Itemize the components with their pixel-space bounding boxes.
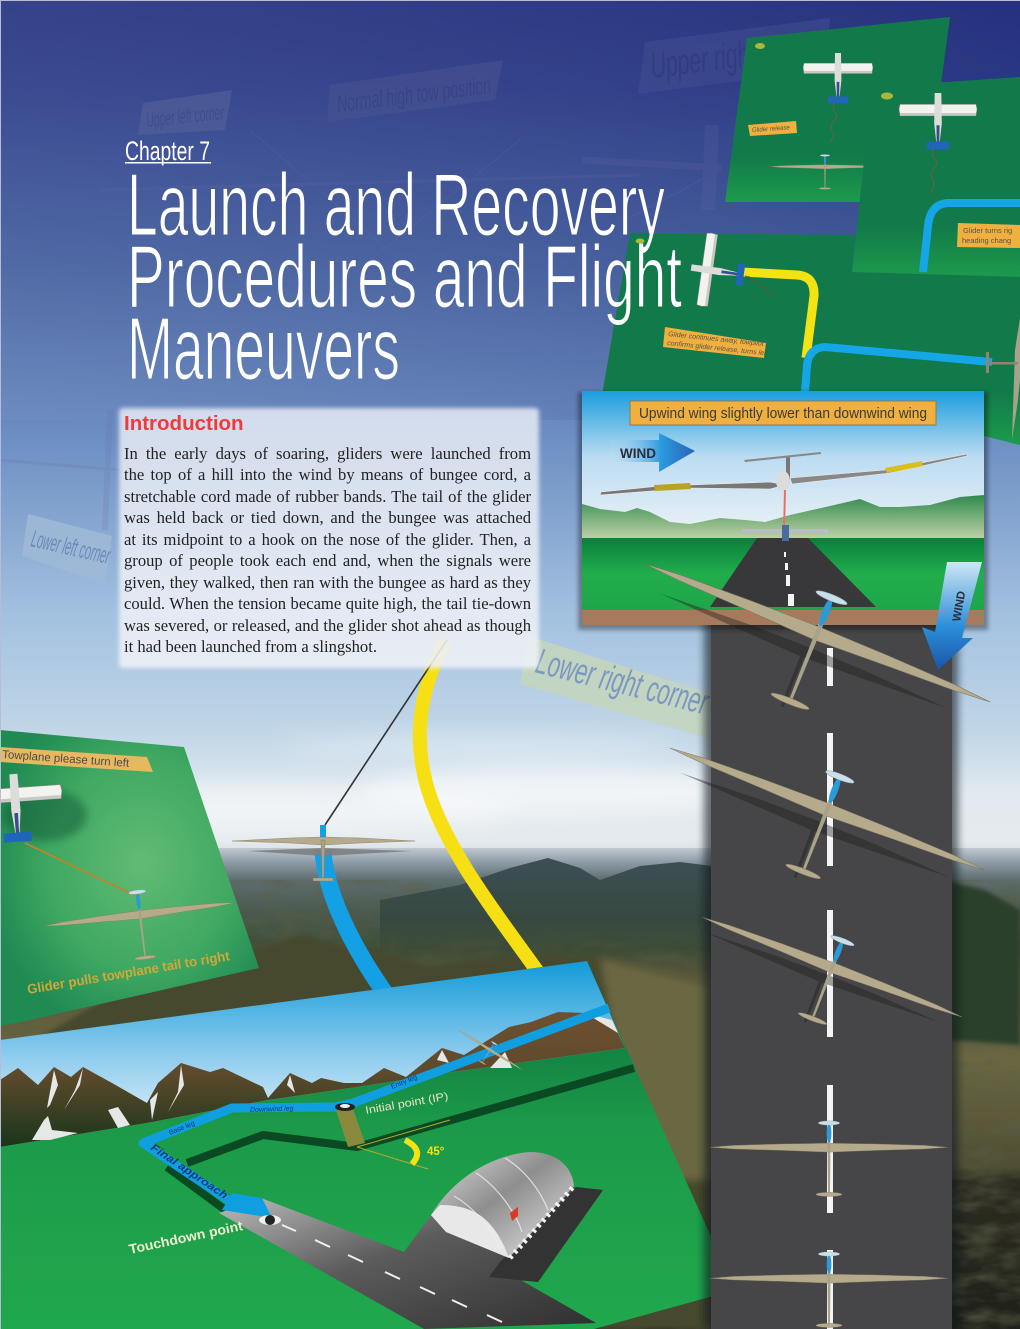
title: Launch and Recovery	[127, 155, 665, 254]
body text: could. When the tension became quite high, the tail tie-down	[124, 594, 531, 613]
label: 45 degrees: 45°	[427, 1146, 445, 1158]
glider wings level 4	[710, 1121, 948, 1196]
towplane turned left	[686, 231, 749, 311]
glider crabbing 2	[645, 713, 998, 935]
ghost label: upper right corner: Upper right	[648, 32, 758, 86]
tag: glider turns right: Glider turns rig	[963, 226, 1012, 235]
landscape	[0, 848, 1020, 1329]
towplane	[0, 771, 65, 845]
yellow flight path	[742, 272, 814, 358]
label: downwind leg: Downwind leg	[250, 1105, 294, 1114]
angle arrow	[405, 1140, 417, 1164]
ghost label: lower right corner	[520, 636, 714, 738]
title	[127, 155, 682, 398]
forested ridge right	[950, 882, 1020, 1045]
blue flight path	[805, 347, 992, 392]
tow rope	[325, 640, 447, 825]
runway dashes	[282, 1225, 502, 1322]
mountains	[0, 1012, 625, 1147]
pylon	[335, 1103, 365, 1147]
tag: towplane please turn left	[0, 747, 153, 772]
body text: at its midpoint to a hook on the nose of the glider. Then, a	[124, 530, 531, 549]
sky background	[0, 0, 1020, 880]
distant hill	[380, 858, 712, 965]
ghost labels and airplanes in the sky: Lower left corner	[29, 526, 113, 570]
towplane ahead	[742, 525, 828, 541]
tag: glider continues: confirms glider release, turns left	[667, 340, 769, 358]
ghost label: normal high tow position	[327, 60, 503, 122]
ground shadow of flight path	[167, 1068, 634, 1212]
body text: stretchable cord made of rubber bands. The tail of the glider	[124, 487, 531, 506]
towplane shadow	[3, 789, 87, 841]
towplane	[899, 93, 977, 149]
tag: panel number	[636, 238, 644, 244]
foreground slope	[0, 935, 712, 1329]
title: Maneuvers	[127, 299, 400, 398]
runway	[710, 538, 876, 607]
brown strip	[582, 610, 984, 625]
tag: glider release	[748, 121, 797, 136]
tow sequence: blue flight path	[323, 850, 390, 1000]
tow rope	[829, 102, 837, 143]
wind arrow down: WIND	[951, 590, 968, 623]
ghost label: lower left corner	[22, 514, 113, 584]
dark runway strip	[704, 620, 958, 1329]
tag: glider continues	[663, 327, 770, 358]
tow rope	[930, 148, 937, 193]
ghost label: upper left corner: Upper left corner	[145, 102, 226, 132]
glider crabbing 1	[616, 526, 1005, 773]
towplane	[803, 53, 873, 103]
glider	[770, 154, 880, 189]
panel: lockout, towplane please turn left	[0, 730, 259, 1026]
ghost label: normal high tow position: Normal high tow position	[335, 72, 493, 118]
body text	[124, 444, 531, 656]
tag: glider release: Glider release	[752, 124, 790, 134]
tag: panel number	[881, 92, 893, 100]
tag: glider turns right	[957, 223, 1020, 248]
touchdown target	[259, 1215, 281, 1225]
chapter label: Chapter 7	[125, 136, 210, 166]
body text: was held back or tied down, and the bungee was attached	[124, 508, 531, 527]
body text: given, they walked, then ran with the bungee as hard as they	[124, 573, 531, 592]
tag: panel number	[755, 43, 765, 49]
body text: it had been launched from a slingshot.	[124, 637, 377, 656]
tow rope	[745, 276, 772, 297]
tow rope	[25, 843, 138, 897]
wind arrow	[610, 433, 695, 472]
wind arrow down	[922, 562, 982, 670]
green field	[582, 538, 984, 610]
tag: glider continues: Glider continues away, towpilot	[668, 331, 765, 348]
body text: was severed, or released, and the glider shot ahead as though	[124, 616, 531, 634]
tow sequence: yellow flight path	[420, 640, 540, 975]
panel: glider continues away	[602, 231, 1020, 445]
centre line dashes	[827, 648, 833, 1329]
label: initial point: Initial point (IP)	[364, 1091, 449, 1117]
heading: introduction: Introduction	[124, 412, 244, 435]
glider front view	[600, 452, 967, 532]
glider wings level 5	[710, 1252, 948, 1327]
title: Procedures and Flight	[127, 227, 682, 326]
tag: glider turns right: heading chang	[962, 236, 1011, 245]
hangar	[431, 1152, 574, 1258]
wing shadow	[248, 848, 412, 856]
glider crabbing 3	[682, 889, 973, 1071]
blue flight path	[143, 1008, 609, 1208]
label: entry leg: Entry leg	[390, 1074, 418, 1091]
intro panel background	[119, 408, 539, 668]
tag: towplane please turn left: Towplane please turn left	[2, 749, 130, 770]
sky	[0, 961, 625, 1147]
panel: glider turns right	[852, 77, 1020, 277]
label: touchdown point: Touchdown point	[128, 1218, 245, 1257]
panel: traffic pattern landing scene	[0, 961, 735, 1329]
label: final approach: Final approach	[148, 1142, 230, 1202]
fuselage nose	[320, 825, 326, 845]
label: Upwind wing slightly lower than downwind wing	[639, 405, 927, 422]
clouds	[0, 735, 760, 832]
glider on tow	[232, 825, 415, 881]
ground angle marker	[357, 1120, 450, 1169]
glider at right edge	[986, 318, 1020, 440]
panel: glider release	[725, 17, 950, 202]
ghost labels and airplanes in the sky	[0, 18, 830, 738]
distant hills	[582, 495, 984, 538]
label: base leg: Base leg	[168, 1120, 196, 1137]
ghost label: lower right corner: Lower right corner	[532, 640, 714, 723]
runway and apron	[219, 1187, 603, 1329]
caption: Glider pulls towplane tail to right	[26, 948, 231, 997]
labels	[128, 1074, 449, 1257]
body text: the top of a hill into the wind by means of bungee cord, a	[124, 465, 531, 484]
ghost airplanes and tow lines	[0, 125, 722, 530]
glider on entry leg	[450, 1023, 527, 1083]
wind arrow: WIND	[620, 446, 656, 461]
wings and tail	[232, 837, 415, 881]
panel: upwind wing low crosswind view	[578, 391, 988, 630]
snow streaks	[32, 1013, 618, 1140]
blue flight path	[923, 203, 1020, 272]
body text: In the early days of soaring, gliders were launched from	[124, 444, 531, 463]
label	[630, 401, 936, 425]
glider	[41, 878, 242, 971]
ghost label: upper left corner	[138, 90, 232, 135]
final approach arrow head	[222, 1193, 272, 1218]
body text: group of people took each end and, when the signals were	[124, 551, 531, 570]
